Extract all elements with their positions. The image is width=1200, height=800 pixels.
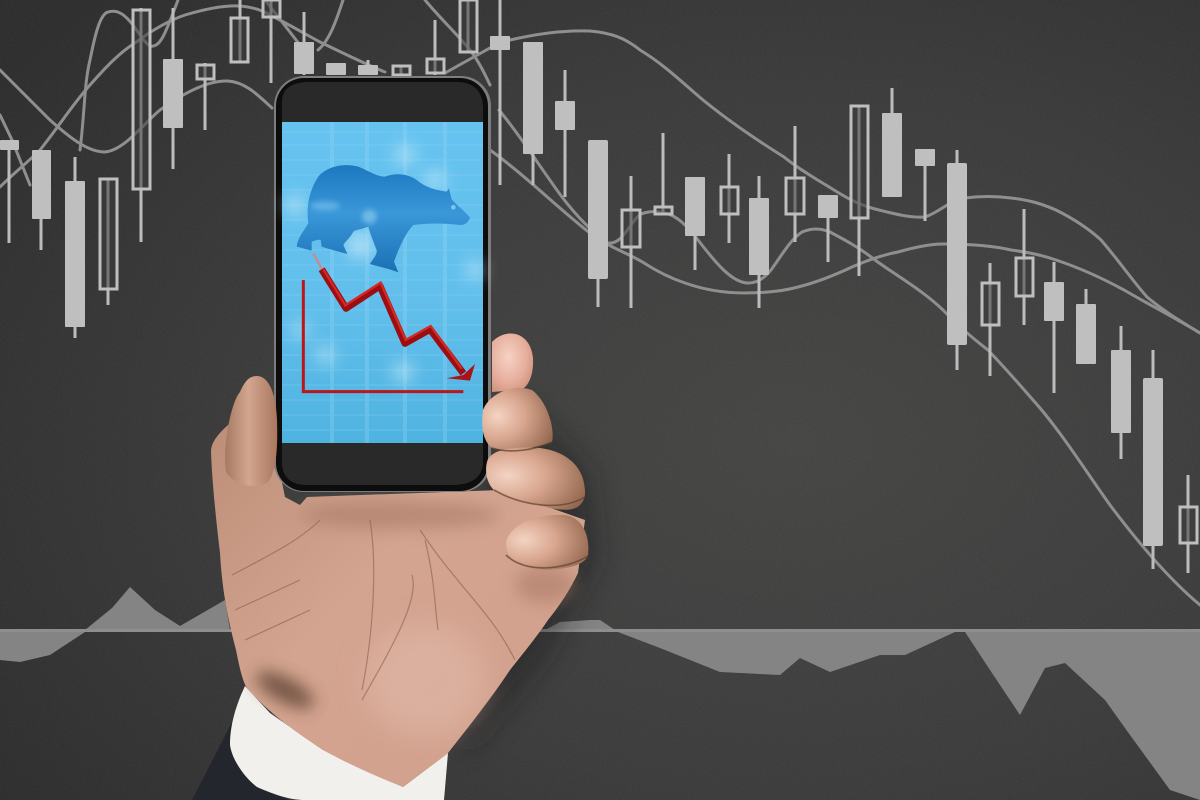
palm creases	[232, 520, 515, 700]
hand shadow	[420, 400, 600, 750]
candlestick chart	[0, 0, 1197, 573]
suit sleeve	[192, 722, 290, 800]
little finger	[506, 515, 588, 570]
phone screen	[282, 122, 484, 443]
hand palm	[211, 376, 585, 787]
middle finger	[482, 388, 553, 450]
ring finger	[486, 448, 585, 510]
volume indicator area chart	[0, 587, 1200, 800]
index finger	[492, 334, 533, 392]
smartphone	[274, 76, 491, 492]
fingers	[482, 334, 588, 570]
filled candles	[0, 36, 1163, 546]
hollow candles	[100, 0, 1197, 543]
palm shading	[251, 664, 319, 716]
icon: falling red line chart	[303, 253, 475, 392]
finger creases	[492, 442, 588, 568]
moving average lines	[0, 0, 1200, 605]
shirt cuff	[230, 686, 448, 800]
icon: bear	[297, 165, 470, 272]
thumb	[225, 376, 277, 486]
